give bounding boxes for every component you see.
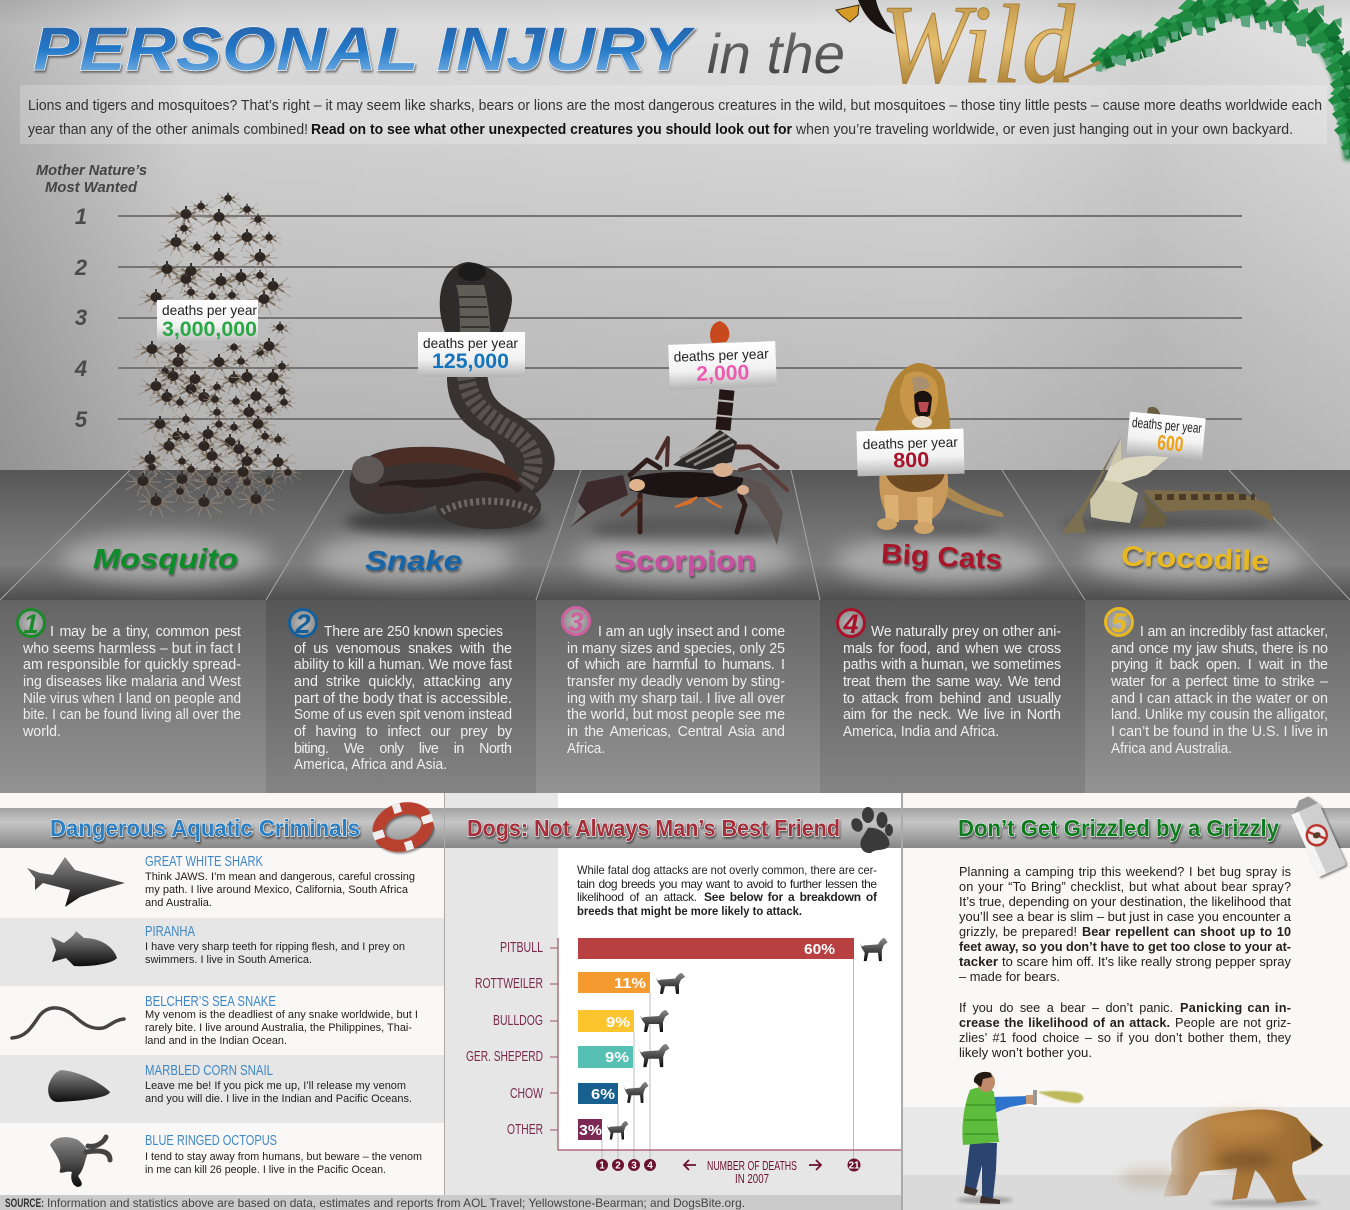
animal names bbox=[93, 538, 1270, 577]
panel: scorpion description bbox=[536, 600, 820, 793]
panel: crocodile description: I can’t be found in the U.S. I live in bbox=[1111, 724, 1328, 740]
lion bbox=[873, 363, 1004, 537]
bar chart: dog breeds: 2 bbox=[615, 1160, 621, 1172]
badge 2 bbox=[290, 609, 316, 639]
text: grizzly paragraph one: grizzly, be prepared! bbox=[959, 925, 1077, 939]
heading: mother nature's most wanted: Most Wanted bbox=[45, 180, 138, 196]
panel: scorpion description: the world, but most people see me bbox=[567, 707, 785, 723]
intro text: dogs: tain dog breeds you may want to avoid to further lessen the bbox=[577, 877, 877, 891]
panel: snake description: of having to infect our prey by bbox=[294, 724, 513, 740]
bar: other bbox=[507, 1119, 628, 1140]
panel: crocodile description: and I can attack in the water or on bbox=[1111, 691, 1328, 707]
axis markers bbox=[596, 1158, 860, 1172]
panel: crocodile description: I am an incredibly fast attacker, bbox=[1140, 624, 1328, 640]
row: belcher's sea snake: rarely bite. I live around Australia, the Philippines, Thai- bbox=[145, 1022, 412, 1034]
label: scorpion deaths: 2,000 bbox=[696, 361, 750, 386]
label: big cats deaths: deaths per year bbox=[863, 434, 958, 452]
text: grizzly paragraph two: likely won’t bother you. bbox=[959, 1046, 1092, 1060]
mosquito swarm bbox=[125, 193, 301, 518]
label: scorpion deaths bbox=[668, 341, 777, 390]
panel: mosquito description: ing diseases like malaria and West bbox=[23, 674, 241, 690]
bar: pitbull bbox=[500, 938, 888, 961]
bar chart: dog breeds: 3 bbox=[631, 1160, 637, 1172]
text: grizzly paragraph one: feet away, so you don’t have to get too close to your at- bbox=[959, 940, 1291, 954]
height line numbers: 2 bbox=[74, 255, 88, 280]
panel: mosquito description: am responsible for quickly spread- bbox=[23, 657, 241, 673]
panel: snake description bbox=[266, 600, 536, 793]
height line numbers: 3 bbox=[75, 305, 87, 330]
icon: spray can bbox=[1287, 794, 1346, 877]
text: grizzly paragraph two: People are not griz- bbox=[1175, 1016, 1291, 1030]
crocodile bbox=[1060, 407, 1275, 533]
panel: big cats description: paths with a human, we sometimes bbox=[843, 657, 1061, 673]
text: grizzly paragraph two: Panicking can in- bbox=[1180, 1001, 1291, 1015]
label: mosquito deaths: deaths per year bbox=[162, 302, 257, 318]
panel: snake description: and strike quickly, attacking any bbox=[294, 674, 513, 690]
icon: life ring bbox=[366, 795, 440, 859]
badge 5 bbox=[1106, 608, 1132, 638]
title: in the: in the bbox=[707, 22, 845, 85]
panel: mosquito description: I may be a tiny, common pest bbox=[50, 624, 241, 640]
row: belcher's sea snake: land and in the Indian Ocean. bbox=[145, 1035, 287, 1047]
text: grizzly paragraph one: on your “To Bring” checklist, but what about bear spray? bbox=[959, 880, 1291, 894]
text: grizzly paragraph two bbox=[959, 1001, 1292, 1060]
text: grizzly paragraph one: tacker bbox=[959, 955, 998, 969]
bar: german shepherd: 9% bbox=[605, 1049, 629, 1066]
panel: crocodile description: water for a perfect time to strike – bbox=[1110, 674, 1328, 690]
floor bbox=[0, 470, 1350, 600]
bar chart: dog breeds: 1 bbox=[599, 1160, 605, 1172]
axis title: IN 2007 bbox=[735, 1172, 769, 1186]
label: scorpion deaths: deaths per year bbox=[673, 345, 769, 365]
heading: mother nature's most wanted bbox=[36, 163, 147, 196]
row: marbled corn snail: MARBLED CORN SNAIL bbox=[145, 1062, 273, 1079]
panel: mosquito description: Nile virus when I land on people and bbox=[23, 691, 241, 707]
panel: scorpion description: in many sizes and species, only 25 bbox=[567, 641, 785, 657]
heading: grizzly: Don’t Get Grizzled by a Grizzly bbox=[958, 815, 1279, 841]
badge 1 bbox=[18, 609, 44, 639]
animal names: Crocodile bbox=[1121, 540, 1270, 577]
badge 2: 2 bbox=[294, 609, 311, 639]
arrows bbox=[684, 1160, 821, 1170]
text: grizzly paragraph one: to scare him off. It’s like really strong pepper spray bbox=[1002, 955, 1292, 969]
bar chart: dog breeds: 4 bbox=[647, 1160, 653, 1172]
bar: pitbull: PITBULL bbox=[500, 939, 543, 956]
row: great white shark: my path. I live around Mexico, California, South Africa bbox=[145, 884, 409, 896]
panel: dogs bbox=[445, 793, 903, 1210]
panel: big cats description: America, India and Africa. bbox=[843, 724, 999, 740]
intro text: dogs: likelihood of an attack. bbox=[577, 890, 697, 904]
panel: scorpion description: transfer my deadly venom by sting- bbox=[567, 674, 785, 690]
panel: snake description: of us venomous snakes with the bbox=[294, 641, 512, 657]
row: piranha bbox=[51, 923, 405, 966]
label: mosquito deaths: 3,000,000 bbox=[162, 318, 257, 341]
intro band: when you’re traveling worldwide, or even just hanging out in your own backyard. bbox=[795, 122, 1293, 138]
animal names: Scorpion bbox=[614, 545, 756, 576]
source bar: SOURCE: bbox=[5, 1196, 44, 1210]
badge 3: 3 bbox=[568, 607, 584, 637]
snake bbox=[345, 262, 555, 536]
panel: big cats description: aim for the neck. We live in North bbox=[843, 707, 1061, 723]
intro band: Lions and tigers and mosquitoes? That’s right – it may seem like sharks, bears or lions are the most dangerous creatures in the wild, but mosquitoes – those tiny little pests – cause more deaths worldwide each bbox=[28, 98, 1322, 114]
row: great white shark: GREAT WHITE SHARK bbox=[145, 853, 263, 870]
row: piranha: PIRANHA bbox=[145, 923, 195, 940]
height line numbers: 1 bbox=[75, 204, 87, 229]
heading: dogs: Dogs: Not Always Man’s Best Friend bbox=[467, 815, 840, 841]
text: grizzly paragraph one: you’ll see a bear is slim – but just in case you encounter a bbox=[959, 910, 1292, 924]
intro text: dogs bbox=[577, 863, 878, 918]
row: belcher's sea snake: My venom is the deadliest of any snake worldwide, but I bbox=[145, 1009, 418, 1021]
row: blue ringed octopus bbox=[50, 1132, 422, 1187]
intro band: year than any of the other animals combined! bbox=[28, 122, 308, 138]
animal names: Mosquito bbox=[93, 543, 238, 574]
panel: snake description: biting. We only live in North bbox=[294, 741, 512, 757]
text: grizzly paragraph one: It’s true, depending on your destination, the likelihood that bbox=[959, 895, 1291, 909]
badge 3 bbox=[562, 607, 590, 637]
animal names: Snake bbox=[365, 545, 462, 576]
panel: snake description: America, Africa and Asia. bbox=[294, 757, 447, 773]
animal names: Big Cats bbox=[880, 538, 1003, 575]
label: crocodile deaths bbox=[1126, 412, 1206, 460]
badge 4 bbox=[838, 609, 864, 639]
axis title: NUMBER OF DEATHS bbox=[707, 1159, 797, 1173]
row: blue ringed octopus: I tend to stay away from humans, but beware – the venom bbox=[145, 1151, 422, 1163]
label: snake deaths: 125,000 bbox=[432, 350, 509, 373]
panel: snake description: ability to kill a human. We move fast bbox=[294, 657, 512, 673]
icon: butterfly and tail bbox=[836, 0, 895, 34]
title: personal injury: PERSONAL INJURY bbox=[33, 15, 696, 83]
scorpion bbox=[570, 321, 787, 545]
intro text: dogs: breeds that might be more likely to attack. bbox=[577, 904, 802, 918]
source bar: Information and statistics above are based on data, estimates and reports from AOL Travel; Yellowstone-Bearman; and DogsBite.org. bbox=[47, 1196, 745, 1210]
row: great white shark: Think JAWS. I’m mean and dangerous, careful crossing bbox=[145, 871, 415, 883]
panel: big cats description bbox=[820, 600, 1085, 793]
panel: crocodile description: Africa and Australia. bbox=[1111, 741, 1232, 757]
bar: bulldog: 9% bbox=[606, 1014, 630, 1031]
height line numbers: 4 bbox=[74, 356, 87, 381]
bar: pitbull: 60% bbox=[804, 941, 835, 958]
row: piranha: I have very sharp teeth for ripping flesh, and I prey on bbox=[145, 941, 405, 953]
panel: scorpion description: I am an ugly insect and I come bbox=[598, 624, 785, 640]
row: great white shark: and Australia. bbox=[145, 897, 212, 909]
heading: aquatic: Dangerous Aquatic Criminals bbox=[50, 815, 360, 841]
bar: other: 3% bbox=[579, 1122, 602, 1139]
bar: german shepherd: GER. SHEPERD bbox=[466, 1048, 543, 1065]
row: piranha: swimmers. I live in South America. bbox=[145, 954, 312, 966]
intro band bbox=[20, 85, 1327, 144]
intro text: dogs: See below for a breakdown of bbox=[704, 890, 878, 904]
row: marbled corn snail: and you will die. I live in the Indian and Pacific Oceans. bbox=[145, 1093, 412, 1105]
panel: mosquito description bbox=[0, 600, 266, 793]
panel: mosquito description: who seems harmless – but in fact I bbox=[22, 641, 241, 657]
height lines bbox=[118, 216, 1242, 419]
bar: chow bbox=[510, 1082, 648, 1104]
badge 5: 5 bbox=[1111, 608, 1127, 638]
bar: chow: 6% bbox=[591, 1086, 615, 1103]
panel: scorpion description: in the Americas, Central Asia and bbox=[567, 724, 785, 740]
row: belcher's sea snake bbox=[12, 993, 418, 1047]
row: blue ringed octopus: BLUE RINGED OCTOPUS bbox=[145, 1132, 277, 1149]
bar: chow: CHOW bbox=[510, 1085, 544, 1102]
panel: mosquito description: world. bbox=[22, 724, 61, 740]
height line numbers bbox=[74, 204, 88, 432]
label: crocodile deaths: deaths per year bbox=[1131, 414, 1203, 436]
text: grizzly paragraph two: zlies’ #1 food choice – so if you don’t bother them, they bbox=[959, 1031, 1292, 1045]
row: blue ringed octopus: in me can kill 26 people. I live in the Pacific Ocean. bbox=[145, 1164, 386, 1176]
label: crocodile deaths: 600 bbox=[1156, 431, 1184, 456]
panel: crocodile description: and once my jaw shuts, there is no bbox=[1111, 641, 1328, 657]
text: grizzly paragraph one: Bear repellent can shoot up to 10 bbox=[1082, 925, 1291, 939]
panel: scorpion description: of which are harmful to humans. I bbox=[567, 657, 785, 673]
intro band: Read on to see what other unexpected creatures you should look out for bbox=[311, 122, 792, 138]
text: grizzly paragraph one bbox=[959, 865, 1292, 984]
vine bbox=[1090, 0, 1350, 160]
label: big cats deaths bbox=[856, 429, 965, 476]
badge 1: 1 bbox=[23, 609, 39, 639]
panel: crocodile description: prying it back open. I wait in the bbox=[1111, 657, 1328, 673]
row: great white shark bbox=[27, 853, 415, 909]
bar: rottweiler bbox=[475, 972, 685, 994]
bar: german shepherd bbox=[466, 1044, 670, 1068]
bar: rottweiler: ROTTWEILER bbox=[475, 975, 543, 992]
row: belcher's sea snake: BELCHER’S SEA SNAKE bbox=[145, 993, 276, 1010]
title bbox=[33, 15, 845, 85]
text: grizzly paragraph two: If you do see a bear – don’t panic. bbox=[959, 1001, 1173, 1015]
bar: bulldog: BULLDOG bbox=[493, 1012, 543, 1029]
bar: bulldog bbox=[493, 1010, 669, 1032]
badge 4: 4 bbox=[842, 609, 859, 639]
icon: paw print bbox=[849, 807, 893, 853]
wall background bbox=[0, 0, 1350, 470]
panel: big cats description: mals for food, and when we cross bbox=[843, 641, 1061, 657]
panel: scorpion description: ing with my sharp tail. I live all over bbox=[567, 691, 785, 707]
panel: snake description: Some of us even spit venom instead bbox=[294, 707, 512, 723]
panel: big cats description: treat them the same way. We tend bbox=[843, 674, 1061, 690]
text: grizzly paragraph one: – made for bears. bbox=[959, 970, 1060, 984]
illustration: grizzly bear bbox=[1120, 1109, 1323, 1206]
panel: grizzly bbox=[903, 793, 1350, 1210]
panel: snake description: part of the body that is accessible. bbox=[294, 691, 512, 707]
row: marbled corn snail: Leave me be! If you pick me up, I’ll release my venom bbox=[145, 1080, 406, 1092]
label: big cats deaths: 800 bbox=[893, 449, 930, 472]
bar: rottweiler: 11% bbox=[614, 975, 646, 992]
panel: crocodile description: land. Unlike my cousin the alligator, bbox=[1111, 707, 1328, 723]
panel: snake description: There are 250 known species bbox=[324, 624, 503, 640]
bar chart: dog breeds: 21 bbox=[848, 1160, 860, 1172]
panel: mosquito description: bite. I can be found living all over the bbox=[23, 707, 241, 723]
panel: aquatic criminals bbox=[0, 793, 446, 1210]
panel: crocodile description bbox=[1085, 600, 1350, 793]
label: snake deaths: deaths per year bbox=[423, 335, 518, 351]
bar chart: dog breeds bbox=[466, 938, 901, 1186]
illustration: man with spray bbox=[957, 1072, 1083, 1204]
panel: scorpion description: Africa. bbox=[567, 741, 605, 757]
label: mosquito deaths bbox=[157, 300, 258, 343]
panel: big cats description: to attack from behind and usually bbox=[843, 691, 1062, 707]
panel: big cats description: We naturally prey on other ani- bbox=[871, 624, 1061, 640]
label: snake deaths bbox=[418, 332, 525, 377]
text: grizzly paragraph two: crease the likelihood of an attack. bbox=[959, 1016, 1170, 1030]
intro text: dogs: While fatal dog attacks are not overly common, there are cer- bbox=[577, 863, 877, 877]
axis title bbox=[707, 1159, 797, 1186]
text: grizzly paragraph one: Planning a camping trip this weekend? I bet bug spray is bbox=[959, 865, 1291, 879]
row: marbled corn snail bbox=[48, 1062, 412, 1105]
bar: other: OTHER bbox=[507, 1121, 543, 1138]
height line numbers: 5 bbox=[75, 407, 88, 432]
heading: mother nature's most wanted: Mother Nature’s bbox=[36, 163, 147, 179]
